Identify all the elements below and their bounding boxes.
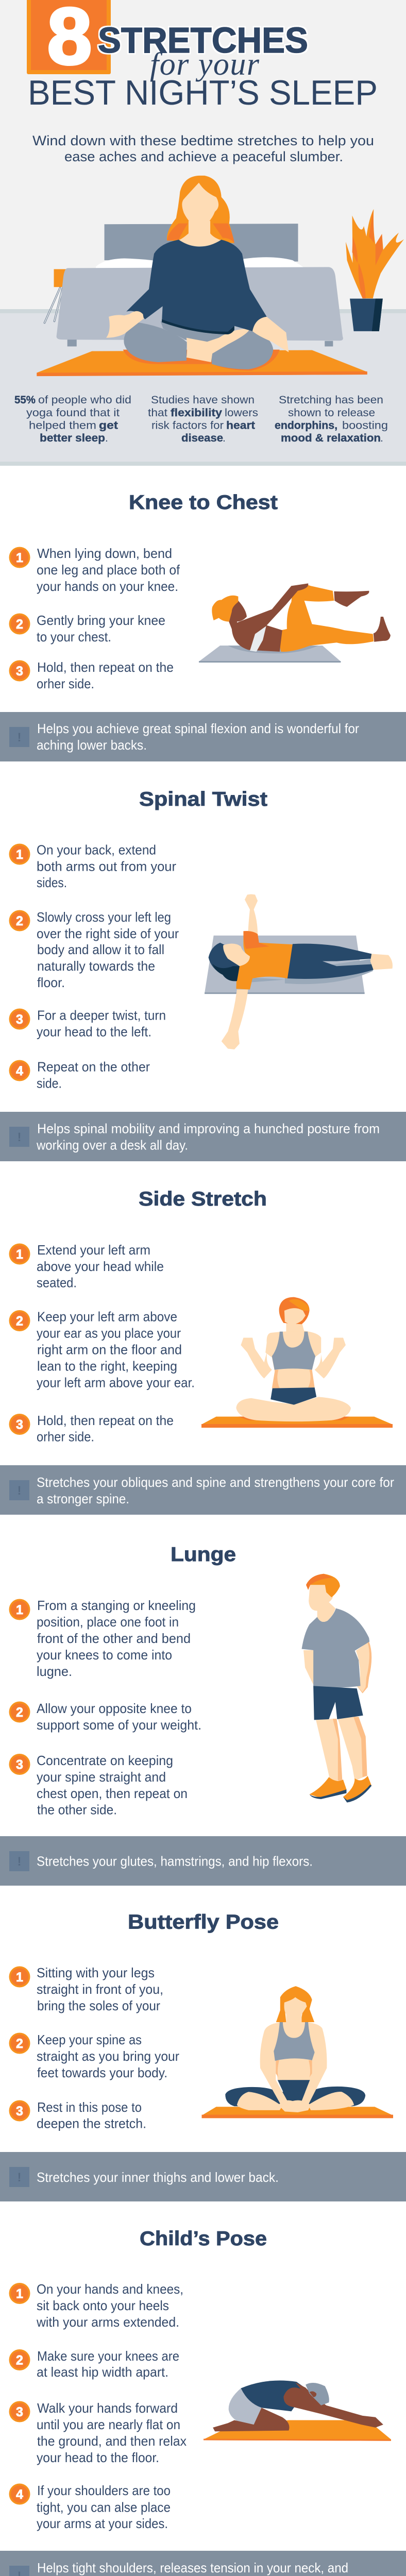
title: for your xyxy=(150,47,260,82)
illustration: woman pulling knee to chest xyxy=(199,583,391,663)
step 3: 3 xyxy=(16,664,23,679)
step 3: 3 xyxy=(16,2405,23,2419)
step 3 xyxy=(9,2099,146,2131)
stat: flexibility: disease xyxy=(181,432,223,444)
stat: yoga sleep xyxy=(14,394,131,444)
step 1 xyxy=(9,546,180,594)
callout: benefit: Helps spinal mobility and improving a hunched posture from xyxy=(37,1121,380,1137)
step 2 xyxy=(9,1701,201,1733)
stat: flexibility: heart xyxy=(226,419,255,432)
step 1: with your arms extended. xyxy=(36,2314,179,2330)
panel: header xyxy=(0,0,406,466)
step 2: right arm on the floor and xyxy=(37,1342,182,1357)
stat: flexibility: Studies have shown xyxy=(151,394,255,406)
step 3: your spine straight and xyxy=(37,1769,166,1785)
step 2: to your chest. xyxy=(37,629,111,645)
step 2 xyxy=(9,2348,179,2380)
step 3 xyxy=(9,659,174,691)
step 1: front of the other and bend xyxy=(37,1631,191,1646)
step 3 xyxy=(9,1413,174,1445)
step 4: tight, you can alse place xyxy=(37,2500,171,2515)
icon: exclamation: ! xyxy=(18,1484,22,1498)
step 2: 2 xyxy=(16,617,23,632)
stat: flexibility: flexibility xyxy=(171,407,222,419)
intro text: ease aches and achieve a peaceful slumber. xyxy=(64,149,343,164)
title: STRETCHES xyxy=(98,20,308,60)
title: BEST NIGHT’S SLEEP xyxy=(28,73,378,112)
badge: number 8 xyxy=(27,0,111,81)
step 3: orher side. xyxy=(37,676,94,691)
step 3: 3 xyxy=(16,1758,23,1772)
step 3 xyxy=(9,2400,187,2465)
step 1: straight in front of you, xyxy=(37,1981,163,1997)
callout: benefit: aching lower backs. xyxy=(37,737,147,753)
stat: yoga sleep: . xyxy=(105,432,108,444)
step 1: 1 xyxy=(16,1970,23,1985)
step 3: 3 xyxy=(16,2104,23,2119)
step 2: your ear as you place your xyxy=(37,1325,181,1341)
step 1: On your back, extend xyxy=(37,842,156,857)
step 1: your knees to come into xyxy=(37,1647,172,1663)
step 2: Keep your spine as xyxy=(37,2032,142,2047)
step 3: Rest in this pose to xyxy=(37,2099,142,2115)
step 4 xyxy=(9,1059,150,1091)
step 3: For a deeper twist, turn xyxy=(37,1008,166,1023)
callout: benefit: working over a desk all day. xyxy=(36,1138,188,1153)
panel: butterfly pose xyxy=(0,1911,406,2201)
icon: exclamation xyxy=(9,2566,29,2576)
stat: endorphins: shown to release xyxy=(288,407,375,419)
step 3: your head to the floor. xyxy=(37,2450,159,2465)
illustration: woman in butterfly pose xyxy=(202,1986,393,2118)
step 3 xyxy=(9,1008,166,1040)
step 4 xyxy=(9,2483,171,2531)
step 1: one leg and place both of xyxy=(37,562,180,578)
panel: child's pose xyxy=(0,2228,406,2576)
step 4: 4 xyxy=(16,1064,23,1078)
callout: benefit xyxy=(0,1112,406,1161)
step 1: both arms out from your xyxy=(37,858,176,874)
step 2: Gently bring your knee xyxy=(37,613,165,628)
panel: lunge xyxy=(0,1544,406,1886)
stat: endorphins: . xyxy=(380,432,383,444)
callout: benefit xyxy=(0,2152,406,2201)
step 4: side. xyxy=(37,1076,62,1091)
callout: benefit: Stretches your glutes, hamstrings, and hip flexors. xyxy=(37,1854,313,1869)
step 2: your left arm above your ear. xyxy=(37,1375,195,1390)
stat: flexibility: that xyxy=(148,407,167,419)
stat: endorphins: boosting xyxy=(342,419,388,432)
step 2: floor. xyxy=(37,975,65,990)
heading: Spinal Twist xyxy=(139,788,267,810)
icon: exclamation: ! xyxy=(18,731,22,744)
callout: benefit: a stronger spine. xyxy=(37,1491,129,1506)
callout: benefit xyxy=(0,1465,406,1515)
step 2: Keep your left arm above xyxy=(37,1309,177,1324)
step 3: orher side. xyxy=(37,1429,94,1445)
illustration: woman lying in spinal twist xyxy=(205,894,393,1049)
step 2: Slowly cross your left leg xyxy=(37,909,171,925)
step 1: 1 xyxy=(16,848,23,862)
step 1: sit back onto your heels xyxy=(37,2298,169,2313)
step 1: 1 xyxy=(16,551,23,565)
step 1: From a stanging or kneeling xyxy=(37,1598,196,1613)
step 1: lugne. xyxy=(37,1664,72,1679)
stat: flexibility: . xyxy=(223,432,226,444)
step 3: deepen the stretch. xyxy=(37,2115,146,2131)
panel: knee to chest xyxy=(0,492,406,761)
heading: Child’s Pose xyxy=(140,2228,267,2250)
icon: exclamation xyxy=(9,2167,29,2187)
step 2: lean to the right, keeping xyxy=(37,1358,177,1374)
heading: Side Stretch xyxy=(139,1188,267,1210)
heading: Knee to Chest xyxy=(129,492,278,514)
step 2: 2 xyxy=(16,2353,23,2368)
intro text: Wind down with these bedtime stretches to help you xyxy=(32,133,374,148)
step 2 xyxy=(9,613,165,645)
icon: exclamation xyxy=(9,1480,29,1500)
step 2: 2 xyxy=(16,914,23,928)
heading: Lunge xyxy=(171,1544,236,1566)
illustration: woman seated cross-legged xyxy=(201,1297,393,1428)
step 1: 1 xyxy=(16,1247,23,1262)
step 2 xyxy=(9,2032,179,2080)
callout: benefit: Helps you achieve great spinal flexion and is wonderful for xyxy=(37,721,359,736)
stat: flexibility: risk factors for xyxy=(151,419,224,432)
icon: exclamation: ! xyxy=(18,2171,22,2184)
step 3: 3 xyxy=(16,1418,23,1432)
stat: yoga sleep: of people who did xyxy=(38,394,131,406)
step 3: your head to the left. xyxy=(37,1024,151,1040)
stat: yoga sleep: 55% xyxy=(14,394,36,406)
step 3: chest open, then repeat on xyxy=(37,1786,188,1801)
step 2: 2 xyxy=(16,1705,23,1720)
step 4: 4 xyxy=(16,2487,23,2502)
intro text xyxy=(32,133,374,164)
callout: benefit xyxy=(0,2551,406,2576)
step 1: your hands on your knee. xyxy=(37,579,178,594)
step 1: seated. xyxy=(37,1275,77,1290)
stat: yoga sleep: helped them xyxy=(29,419,96,432)
panel: side stretch xyxy=(0,1188,406,1515)
callout: benefit: Stretches your obliques and spine and strengthens your core for xyxy=(37,1475,394,1490)
step 3: Walk your hands forward xyxy=(37,2400,178,2416)
step 2 xyxy=(9,1309,195,1390)
stat: flexibility xyxy=(148,394,258,444)
icon: exclamation: ! xyxy=(18,1130,22,1144)
step 3: Concentrate on keeping xyxy=(37,1753,173,1768)
step 1: Extend your left arm xyxy=(37,1242,150,1258)
stat: endorphins: mood & relaxation xyxy=(281,432,381,444)
step 2: feet towards your body. xyxy=(37,2065,167,2080)
step 1 xyxy=(9,1598,196,1679)
step 4: If your shoulders are too xyxy=(37,2483,171,2498)
step 1 xyxy=(9,1242,164,1290)
step 1: 1 xyxy=(16,2286,23,2301)
step 2: 2 xyxy=(16,2037,23,2051)
stat: yoga sleep: yoga found that it xyxy=(26,407,120,419)
panel: spinal twist xyxy=(0,788,406,1161)
heading: Butterfly Pose xyxy=(128,1911,279,1933)
callout: benefit xyxy=(0,1836,406,1886)
icon: exclamation: ! xyxy=(18,1855,22,1869)
step 1: Sitting with your legs xyxy=(37,1965,155,1980)
callout: benefit xyxy=(0,712,406,761)
step 3: Hold, then repeat on the xyxy=(37,1413,174,1428)
step 3: the ground, and then relax xyxy=(37,2433,187,2449)
step 3: the other side. xyxy=(37,1802,117,1818)
step 1: above your head while xyxy=(37,1259,164,1274)
step 4: Repeat on the other xyxy=(37,1059,150,1075)
illustration: woman meditating by a bed xyxy=(37,176,404,376)
stat: endorphins xyxy=(275,394,388,444)
step 1 xyxy=(9,842,176,890)
step 2: body and allow it to fall xyxy=(37,942,164,957)
step 1: When lying down, bend xyxy=(37,546,172,561)
icon: exclamation xyxy=(9,1127,29,1147)
step 1: 1 xyxy=(16,1603,23,1617)
step 1: position, place one foot in xyxy=(37,1614,179,1630)
stat: yoga sleep: get xyxy=(99,419,118,432)
callout: benefit: Helps tight shoulders, releases tension in your neck, and xyxy=(37,2560,348,2575)
stat: flexibility: lowers xyxy=(225,407,258,419)
stat: endorphins: Stretching has been xyxy=(279,394,383,406)
step 2: at least hip width apart. xyxy=(37,2364,168,2380)
illustration: man standing xyxy=(302,1574,371,1803)
illustration: man in child's pose xyxy=(204,2380,391,2441)
title xyxy=(28,20,378,112)
stat: yoga sleep: better sleep xyxy=(40,432,105,444)
step 4: your arms at your sides. xyxy=(37,2516,168,2531)
step 2: Allow your opposite knee to xyxy=(37,1701,192,1716)
icon: exclamation xyxy=(9,1851,29,1871)
stat: endorphins: endorphins, xyxy=(275,419,337,432)
step 2: support some of your weight. xyxy=(37,1717,201,1733)
step 3 xyxy=(9,1753,188,1818)
step 1 xyxy=(9,2281,183,2330)
step 2: straight as you bring your xyxy=(37,2048,179,2064)
step 1 xyxy=(9,1965,163,2013)
step 2: Make sure your knees are xyxy=(37,2348,179,2364)
step 1: sides. xyxy=(37,875,67,890)
step 1: bring the soles of your xyxy=(37,1998,160,2013)
callout: benefit: Stretches your inner thighs and lower back. xyxy=(37,2170,279,2185)
icon: exclamation xyxy=(9,727,29,747)
step 2: naturally towards the xyxy=(37,958,155,974)
step 2 xyxy=(9,909,179,990)
step 2: 2 xyxy=(16,1314,23,1328)
step 3: 3 xyxy=(16,1012,23,1027)
step 3: Hold, then repeat on the xyxy=(37,659,174,675)
step 3: until you are nearly flat on xyxy=(37,2417,180,2432)
step 2: over the right side of your xyxy=(37,926,179,941)
step 1: On your hands and knees, xyxy=(37,2281,183,2297)
